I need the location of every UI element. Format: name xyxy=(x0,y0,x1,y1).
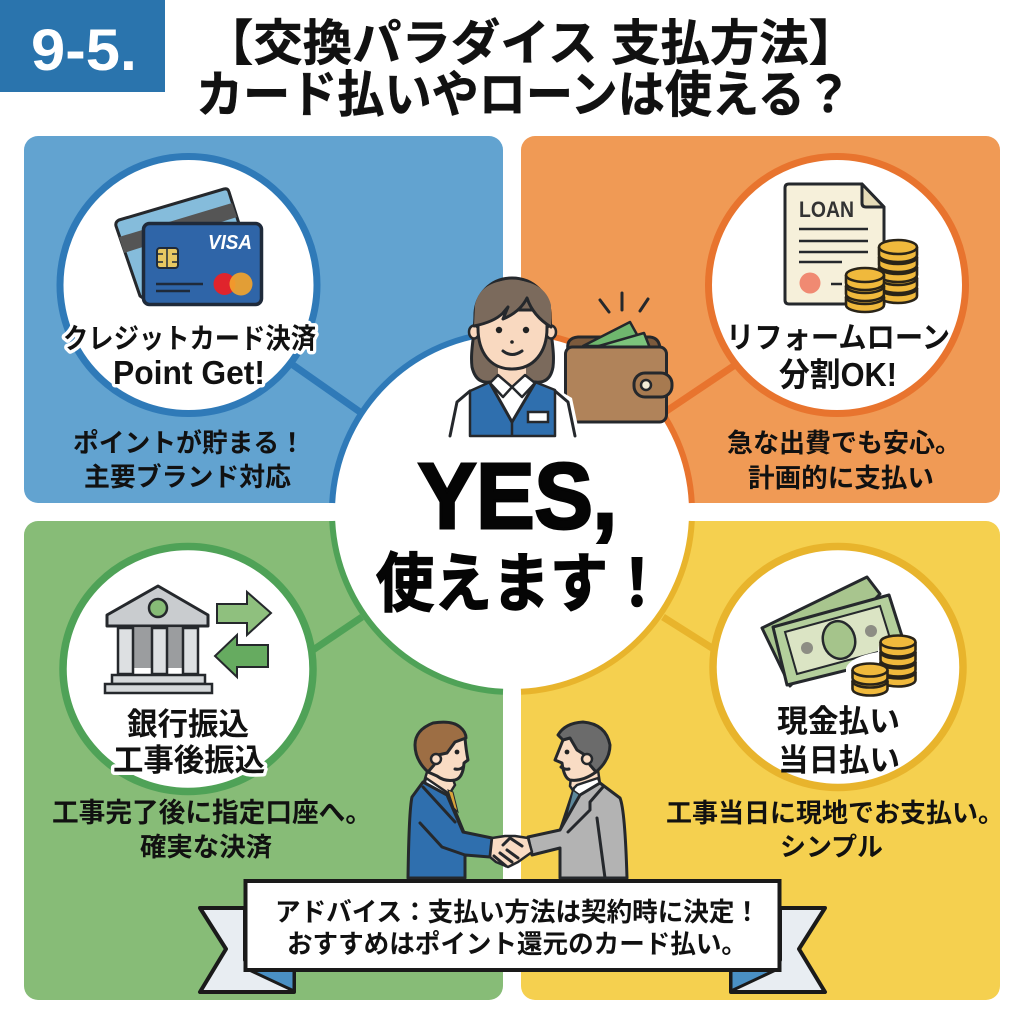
center circle xyxy=(332,332,692,692)
label: credit card xyxy=(63,323,316,391)
text: credit card note: ポイントが貯まる！ xyxy=(73,428,305,458)
label: reform loan xyxy=(726,322,950,393)
label: credit card: クレジットカード決済 xyxy=(63,323,316,354)
section number badge: 9-5. xyxy=(31,18,137,83)
panel: reform loan xyxy=(521,136,1000,503)
text: bank transfer note xyxy=(52,798,372,862)
title xyxy=(196,17,858,123)
advice text: おすすめはポイント還元のカード払い。 xyxy=(287,929,747,959)
label: reform loan: リフォームローン xyxy=(726,322,950,355)
person: contractor in gray suit xyxy=(528,722,627,878)
text: cash payment note: シンプル xyxy=(780,832,883,862)
person: staff woman xyxy=(449,278,580,436)
label: cash payment: 当日払い xyxy=(778,743,900,778)
icon: handshake xyxy=(490,836,532,867)
icon: loan document and coins: LOAN xyxy=(799,197,854,222)
icon: bank with transfer arrows xyxy=(105,586,271,693)
advice text: アドバイス：支払い方法は契約時に決定！ xyxy=(275,897,760,927)
icon: credit cards xyxy=(116,189,262,304)
panel: bank transfer xyxy=(24,521,503,1000)
text: reform loan note xyxy=(727,428,961,493)
icon: banknotes and coins xyxy=(762,577,922,700)
advice text xyxy=(275,897,760,959)
text: cash payment note: 工事当日に現地でお支払い。 xyxy=(666,798,1004,828)
text: reform loan note: 急な出費でも安心。 xyxy=(727,428,961,458)
text: credit card note xyxy=(73,428,305,492)
text: credit card note: 主要ブランド対応 xyxy=(84,462,291,492)
label: bank transfer: 工事後振込 xyxy=(113,743,265,778)
icon: credit cards: VISA xyxy=(208,232,252,254)
person: customer in blue suit xyxy=(408,722,492,878)
panel: cash payment xyxy=(521,521,1004,1000)
label: bank transfer: 銀行振込 xyxy=(127,707,249,742)
headline: 使えます！: 使えます！ xyxy=(376,548,666,620)
icon: loan document and coins xyxy=(785,184,917,312)
label: reform loan: 分割OK! xyxy=(779,356,897,393)
title: 【交換パラダイス 支払方法】 xyxy=(204,17,858,71)
text: bank transfer note: 確実な決済 xyxy=(140,832,272,862)
section number badge xyxy=(0,0,165,92)
label: bank transfer xyxy=(113,707,265,778)
label: cash payment: 現金払い xyxy=(777,704,900,739)
label: credit card: Point Get! xyxy=(113,354,265,391)
text: reform loan note: 計画的に支払い xyxy=(748,463,934,493)
text: cash payment note xyxy=(666,798,1004,862)
ribbon banner xyxy=(200,881,825,992)
panel: credit card xyxy=(24,136,503,503)
label: cash payment xyxy=(777,704,900,778)
text: bank transfer note: 工事完了後に指定口座へ。 xyxy=(52,798,372,828)
wallet icon xyxy=(566,293,672,436)
headline: YES,: YES, xyxy=(418,444,617,548)
title: カード払いやローンは使える？ xyxy=(196,67,852,123)
